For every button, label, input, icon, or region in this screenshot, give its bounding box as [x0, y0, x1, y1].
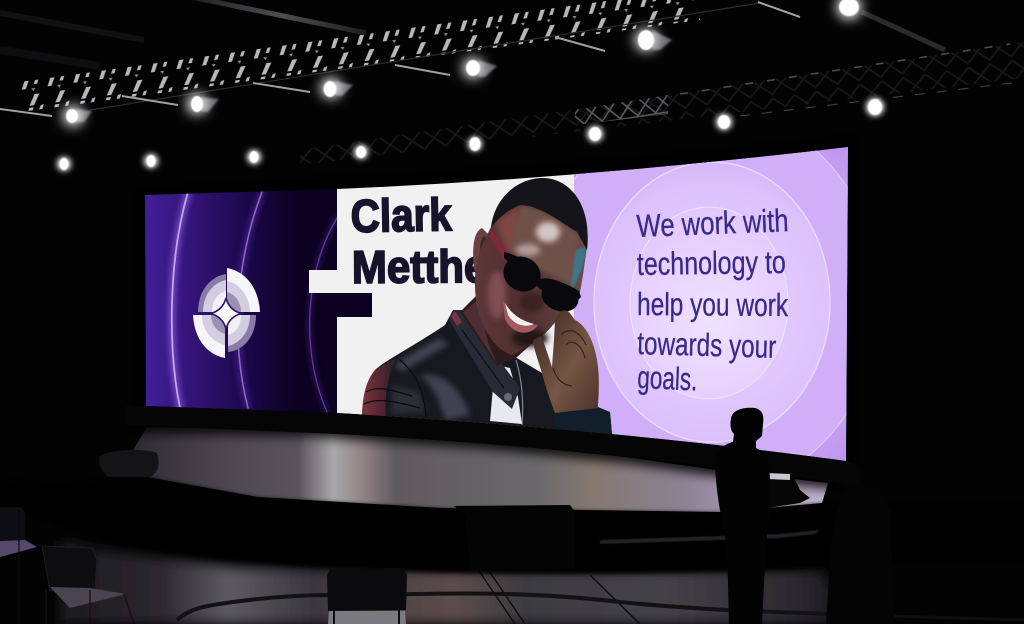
- logo bottom-left quadrant: [193, 315, 225, 358]
- stage floor: [125, 405, 860, 512]
- floor ring rail: [177, 593, 830, 620]
- message text: help you work: [637, 286, 789, 323]
- name heading: Metthew: [352, 240, 520, 293]
- finger creases: [553, 331, 586, 386]
- name heading: [352, 196, 476, 284]
- hair: [491, 178, 588, 250]
- ceiling beams: [196, 0, 366, 33]
- screen housing: [135, 134, 856, 470]
- led screen: [145, 147, 848, 461]
- message text: technology to: [637, 244, 786, 282]
- logo bottom-right quadrant: [228, 315, 256, 352]
- upper truss: [20, 0, 700, 112]
- ear: [473, 228, 488, 274]
- message text: towards your: [637, 325, 777, 365]
- forehead highlight: [536, 222, 560, 242]
- teal rim light: [570, 247, 586, 292]
- chair: back left: [0, 507, 37, 624]
- floor top fade: [125, 425, 840, 482]
- jacket sleeve highlight: [362, 358, 396, 418]
- panel: white name: [337, 170, 575, 432]
- projector: [99, 450, 159, 477]
- collar: [449, 310, 520, 409]
- sleeve: [555, 408, 612, 434]
- shirt: [490, 365, 522, 424]
- photo: man with sunglasses: [362, 178, 612, 434]
- message text: goals.: [637, 359, 698, 398]
- screen apron: [125, 405, 860, 486]
- jacket sheen: [392, 338, 470, 420]
- rig bars: [0, 2, 800, 116]
- mouth: [503, 301, 538, 333]
- logo star: [211, 298, 241, 329]
- dark connector block: [337, 293, 372, 317]
- cheek shading: [488, 271, 506, 319]
- temple: [489, 230, 510, 260]
- panel: lavender message: [574, 147, 848, 461]
- logo top-left quadrant: [198, 274, 226, 312]
- neck: [460, 296, 538, 366]
- forehead shading: [495, 206, 522, 254]
- button: [504, 393, 512, 401]
- auditorium floor: [60, 540, 1024, 624]
- stage lights: [57, 0, 884, 171]
- chairs: [0, 507, 407, 624]
- jacket: [362, 310, 612, 434]
- logo top-right quadrant: [227, 268, 260, 312]
- message text: We work with: [636, 202, 789, 244]
- forehead skin: [510, 205, 578, 285]
- glow arcs: [172, 192, 337, 412]
- riser light strip: [600, 530, 820, 544]
- truss lower chord: [90, 3, 760, 110]
- concentric rings: [574, 150, 848, 456]
- chair: front left: [42, 546, 134, 624]
- rigging: [0, 0, 1024, 165]
- jacket stitching: [364, 360, 426, 418]
- stage riser: [0, 478, 1024, 574]
- lectern: [454, 505, 575, 570]
- zip detail: [516, 360, 523, 425]
- icon: logo mark: [193, 268, 260, 358]
- sunglasses: [504, 252, 581, 312]
- message text: [636, 202, 789, 398]
- truss ticks: [680, 44, 1010, 94]
- lower truss: [300, 42, 1024, 165]
- silhouette: second person: [826, 485, 895, 624]
- nose: [520, 292, 544, 312]
- floor seams: [477, 568, 640, 624]
- hand: [533, 310, 599, 418]
- panel: purple logo: [140, 185, 340, 415]
- upper spotlights: [63, 0, 861, 126]
- chair: center: [327, 568, 407, 624]
- white connector block: [309, 270, 337, 293]
- laptop on stage: [767, 473, 810, 508]
- lower spotlights: [57, 98, 884, 171]
- silhouette: presenter: [715, 408, 770, 624]
- face: [475, 202, 587, 355]
- name heading: Clark: [350, 188, 453, 242]
